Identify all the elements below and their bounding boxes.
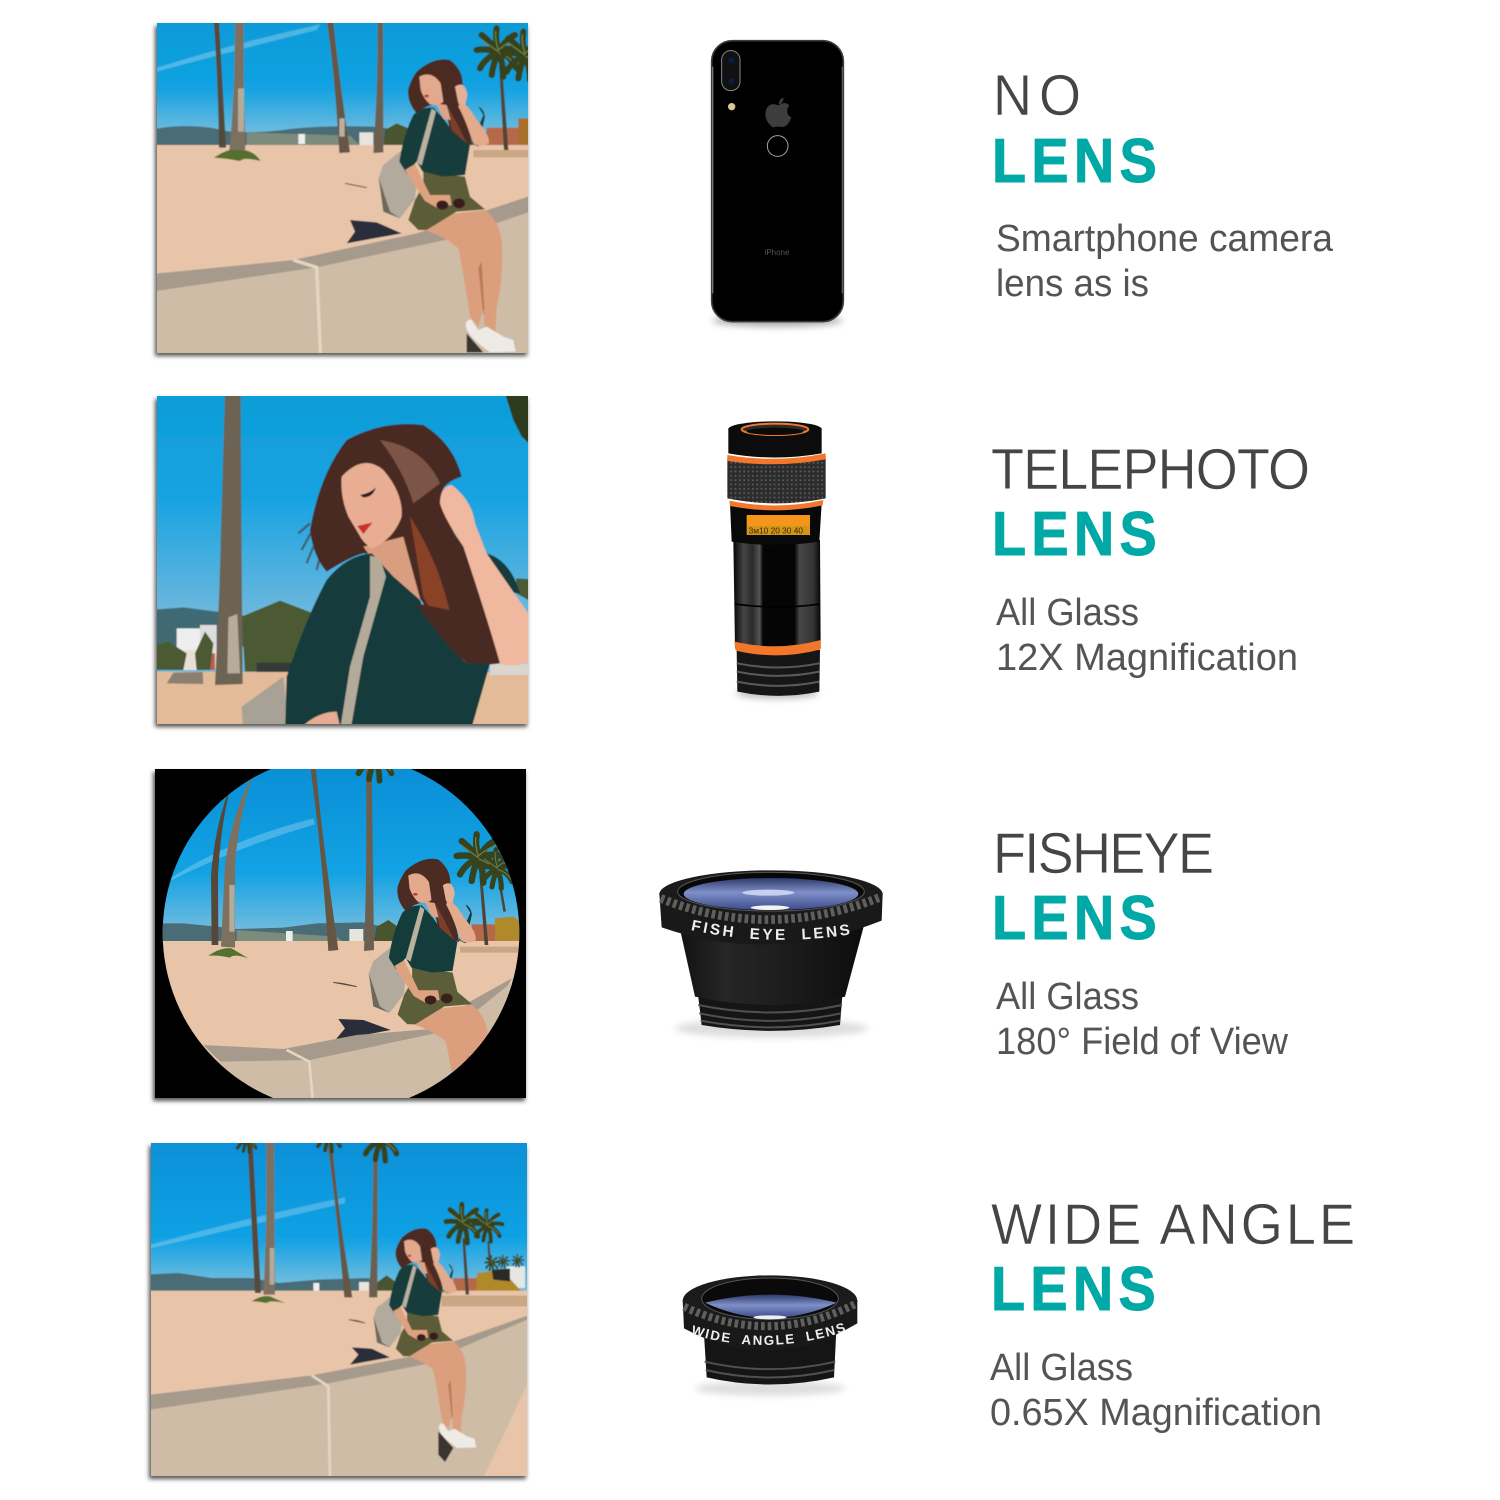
icon: smartphone back [712, 41, 843, 327]
description: wide angle lens: All Glass [990, 1347, 1133, 1389]
row: no lens [150, 15, 1334, 358]
heading: telephoto lens: TELEPHOTO [991, 436, 1310, 501]
icon: wide angle lens [682, 1275, 858, 1398]
description: fisheye lens: All Glass [996, 976, 1139, 1018]
description: telephoto lens: All Glass [996, 592, 1139, 634]
heading: no lens: NO [993, 62, 1081, 127]
description: no lens: lens as is [996, 263, 1149, 305]
description: wide angle lens [990, 1347, 1322, 1434]
icon: telephoto lens [727, 421, 826, 699]
row: telephoto lens [150, 390, 1310, 733]
infographic canvas [146, 22, 1352, 1482]
description: telephoto lens: 12X Magnification [996, 637, 1298, 679]
icon: wide angle lens: WIDE ANGLE LENS [692, 1323, 845, 1345]
description: no lens: Smartphone camera [996, 218, 1334, 260]
heading: wide angle lens: WIDE ANGLE [991, 1191, 1355, 1256]
icon: fisheye lens: FISH EYE LENS [692, 920, 850, 940]
heading: fisheye lens [992, 820, 1214, 953]
photo: telephoto [150, 390, 540, 733]
heading: no lens [992, 62, 1157, 196]
icon: smartphone back: iPhone [765, 248, 790, 257]
photo: fisheye [150, 768, 528, 1104]
heading: no lens: LENS [992, 127, 1157, 196]
heading: telephoto lens: LENS [992, 500, 1157, 569]
description: no lens [996, 218, 1334, 305]
heading: telephoto lens [991, 436, 1310, 569]
description: fisheye lens [996, 976, 1289, 1063]
heading: wide angle lens: LENS [991, 1255, 1156, 1324]
icon: fisheye lens [659, 870, 884, 1040]
heading: fisheye lens: FISHEYE [993, 820, 1214, 885]
row: fisheye lens [150, 768, 1289, 1104]
heading: fisheye lens: LENS [992, 884, 1157, 953]
description: telephoto lens [996, 592, 1298, 679]
row: wide angle lens [146, 1142, 1355, 1482]
photo: wide angle [145, 1120, 535, 1481]
photo: no lens [150, 15, 548, 358]
heading: wide angle lens [991, 1191, 1355, 1324]
icon: telephoto lens: 3м10 20 30 40 [749, 526, 803, 536]
description: fisheye lens: 180° Field of View [996, 1021, 1289, 1063]
description: wide angle lens: 0.65X Magnification [990, 1392, 1322, 1434]
